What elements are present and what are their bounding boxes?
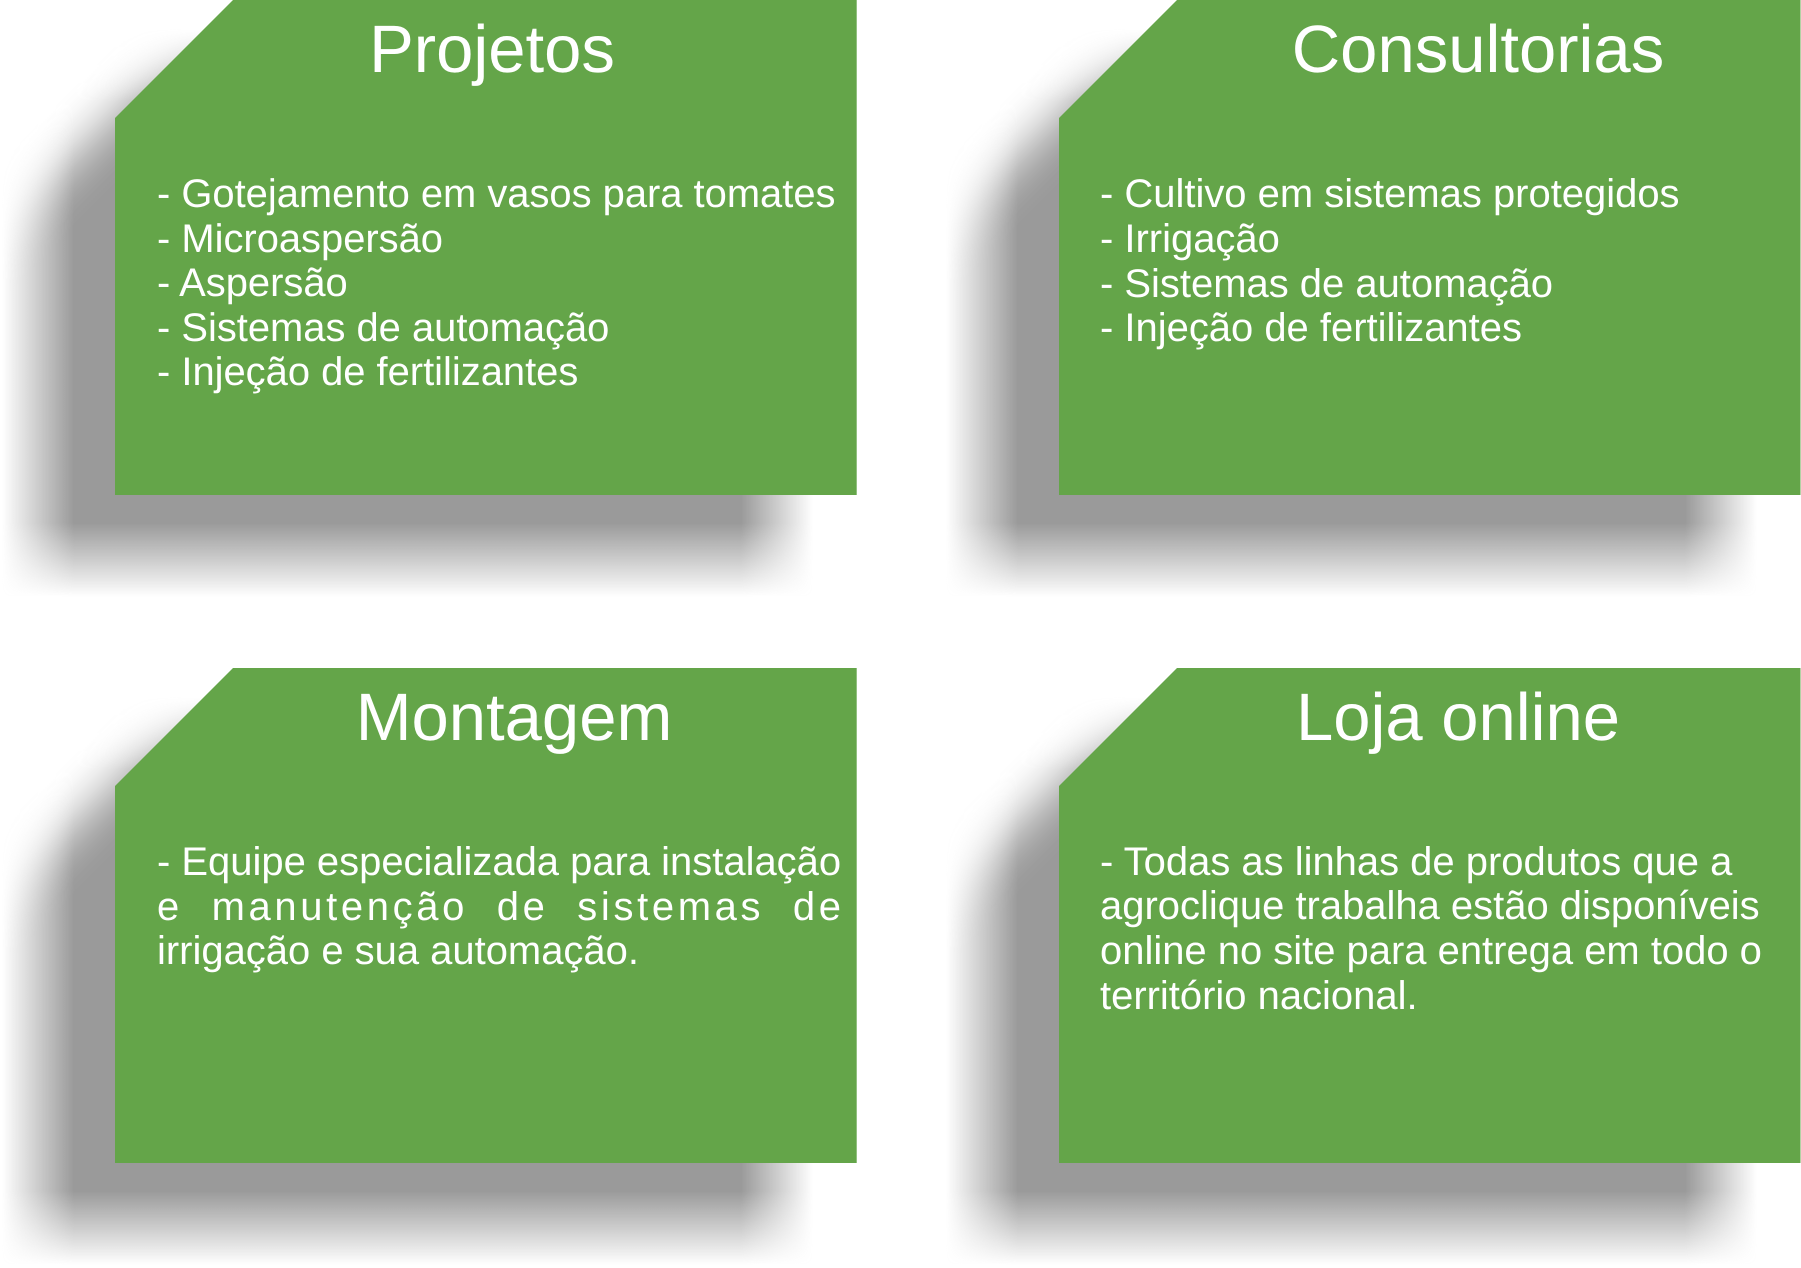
text block: Montagem description: - Equipe especializada para instalação	[157, 840, 841, 884]
text block: Loja online description: - Todas as linhas de produtos que a	[1100, 840, 1733, 884]
text block: Loja online description: território nacional.	[1100, 974, 1418, 1018]
panel shadow	[8, 40, 808, 591]
text block: Loja online description	[1100, 840, 1762, 1018]
heading: Consultorias: Consultorias	[1292, 12, 1664, 87]
panel background	[1059, 0, 1800, 495]
panel: Montagem	[0, 668, 900, 1268]
heading: Loja online: Loja online	[1296, 680, 1620, 755]
list: Projetos services: - Aspersão	[157, 261, 348, 305]
panel shadow	[8, 708, 807, 1259]
panel background	[115, 0, 857, 495]
list: Consultorias services: - Injeção de fertilizantes	[1100, 306, 1522, 350]
text block: Loja online description: online no site para entrega em todo o	[1100, 929, 1762, 973]
text block: Montagem description	[157, 840, 841, 973]
list: Projetos services: - Gotejamento em vasos para tomates	[157, 172, 835, 216]
panel: Loja online	[944, 668, 1801, 1268]
list: Consultorias services: - Sistemas de automação	[1100, 262, 1553, 306]
list: Projetos services: - Injeção de fertilizantes	[157, 350, 578, 394]
list: Projetos services: - Microaspersão	[157, 217, 443, 261]
panel shadow	[952, 40, 1751, 591]
panel: Consultorias	[944, 0, 1801, 620]
text block: Montagem description: irrigação e sua automação.	[157, 929, 639, 973]
list: Consultorias services: - Cultivo em sistemas protegidos	[1100, 172, 1680, 216]
panel background	[1059, 668, 1800, 1163]
text block: Loja online description: agroclique trabalha estão disponíveis	[1100, 884, 1760, 928]
panel background	[115, 668, 857, 1163]
list: Projetos services	[157, 172, 835, 394]
text block: Montagem description: e manutenção de sistemas de	[157, 885, 841, 929]
list: Projetos services: - Sistemas de automação	[157, 306, 609, 350]
list: Consultorias services	[1100, 172, 1680, 350]
list: Consultorias services: - Irrigação	[1100, 217, 1280, 261]
panel shadow	[952, 708, 1751, 1259]
heading: Projetos: Projetos	[369, 12, 615, 87]
heading: Montagem: Montagem	[356, 680, 672, 755]
panel: Projetos	[8, 0, 857, 591]
